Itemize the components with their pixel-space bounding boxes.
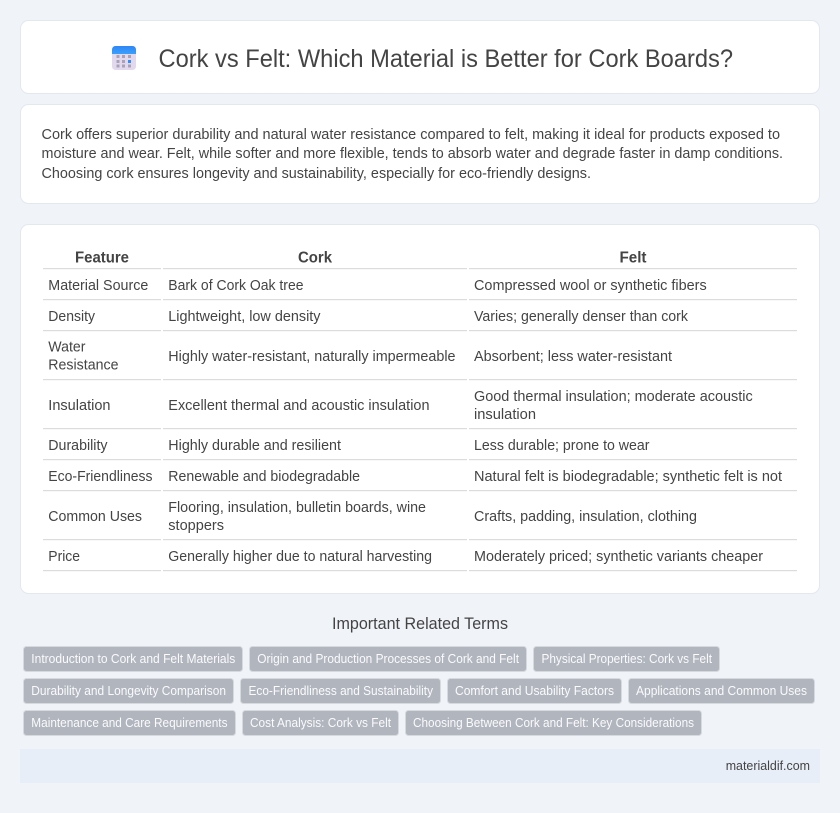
row: water resistance: Water [48,340,86,356]
panel: introduction [20,104,820,204]
row: price: Price [48,549,80,565]
row: water resistance: Resistance [48,358,118,374]
text block: introduction: Cork offers superior durability and natural water resistance compared to felt, making it ideal for products exposed to [42,127,780,143]
table header row: Felt [620,250,647,266]
tag list: related terms: Cost Analysis: Cork vs Felt [250,716,391,730]
tag list: related terms: Eco-Friendliness and Sustainability [248,684,434,698]
panel: comparison table [20,224,820,594]
row: density: Density [48,309,96,325]
row: durability: Durability [48,438,108,454]
tag list: related terms: Maintenance and Care Requirements [31,716,227,730]
row: water resistance: Highly water-resistant, naturally impermeable [168,349,456,365]
row: price [48,549,763,565]
row: water resistance: Absorbent; less water-resistant [474,349,672,365]
tag list: related terms: Introduction to Cork and Felt Materials [31,652,235,666]
row: common uses [48,500,697,534]
row: price: Moderately priced; synthetic variants cheaper [474,549,763,565]
icon: calendar [112,46,136,70]
row: insulation: Good thermal insulation; moderate acoustic [474,389,753,405]
table header row: Feature [75,250,129,266]
text block: introduction: Choosing cork ensures longevity and sustainability, especially for eco-friendly designs. [42,166,591,182]
row: eco-friendliness: Renewable and biodegradable [168,469,360,485]
row: common uses: stoppers [168,518,224,534]
row: density [48,309,689,325]
row: common uses: Common Uses [48,509,142,525]
tag list: related terms: Physical Properties: Cork vs Felt [542,652,712,666]
row: durability [48,438,650,454]
row: eco-friendliness [48,469,782,485]
row: insulation [48,389,753,423]
row: insulation: Excellent thermal and acoustic insulation [168,398,430,414]
tag list: related terms: Origin and Production Processes of Cork and Felt [257,652,519,666]
row: common uses: Flooring, insulation, bulletin boards, wine [168,500,426,516]
tag list: related terms: Applications and Common Uses [636,684,807,698]
row: density: Lightweight, low density [168,309,321,325]
footer [20,749,820,783]
tag list: related terms [24,646,814,736]
row: eco-friendliness: Eco-Friendliness [48,469,152,485]
tag list: related terms: Comfort and Usability Factors [455,684,614,698]
row: insulation: insulation [474,407,536,423]
row: material source: Material Source [48,278,148,294]
panel: page header [20,20,820,94]
tag list: related terms: Choosing Between Cork and Felt: Key Considerations [413,716,694,730]
title: Cork vs Felt: Which Material is Better for Cork Boards? [158,45,733,73]
text block: introduction [42,127,783,182]
table header row: Cork [298,250,332,266]
heading: related terms: Important Related Terms [332,615,508,633]
row: insulation: Insulation [48,398,110,414]
row: durability: Less durable; prone to wear [474,438,650,454]
tag list: related terms: Durability and Longevity Comparison [31,684,226,698]
row: durability: Highly durable and resilient [168,438,341,454]
row: common uses: Crafts, padding, insulation, clothing [474,509,697,525]
table header row [75,250,647,266]
text block: introduction: moisture and wear. Felt, while softer and more flexible, tends to absorb water and degrade faster in damp conditions. [42,146,783,162]
row: material source: Bark of Cork Oak tree [168,278,304,294]
row: water resistance [48,340,672,374]
row: material source: Compressed wool or synthetic fibers [474,278,707,294]
row: eco-friendliness: Natural felt is biodegradable; synthetic felt is not [474,469,782,485]
footer: materialdif.com [726,758,810,773]
row: density: Varies; generally denser than cork [474,309,689,325]
row: material source [48,278,707,294]
row: price: Generally higher due to natural harvesting [168,549,432,565]
